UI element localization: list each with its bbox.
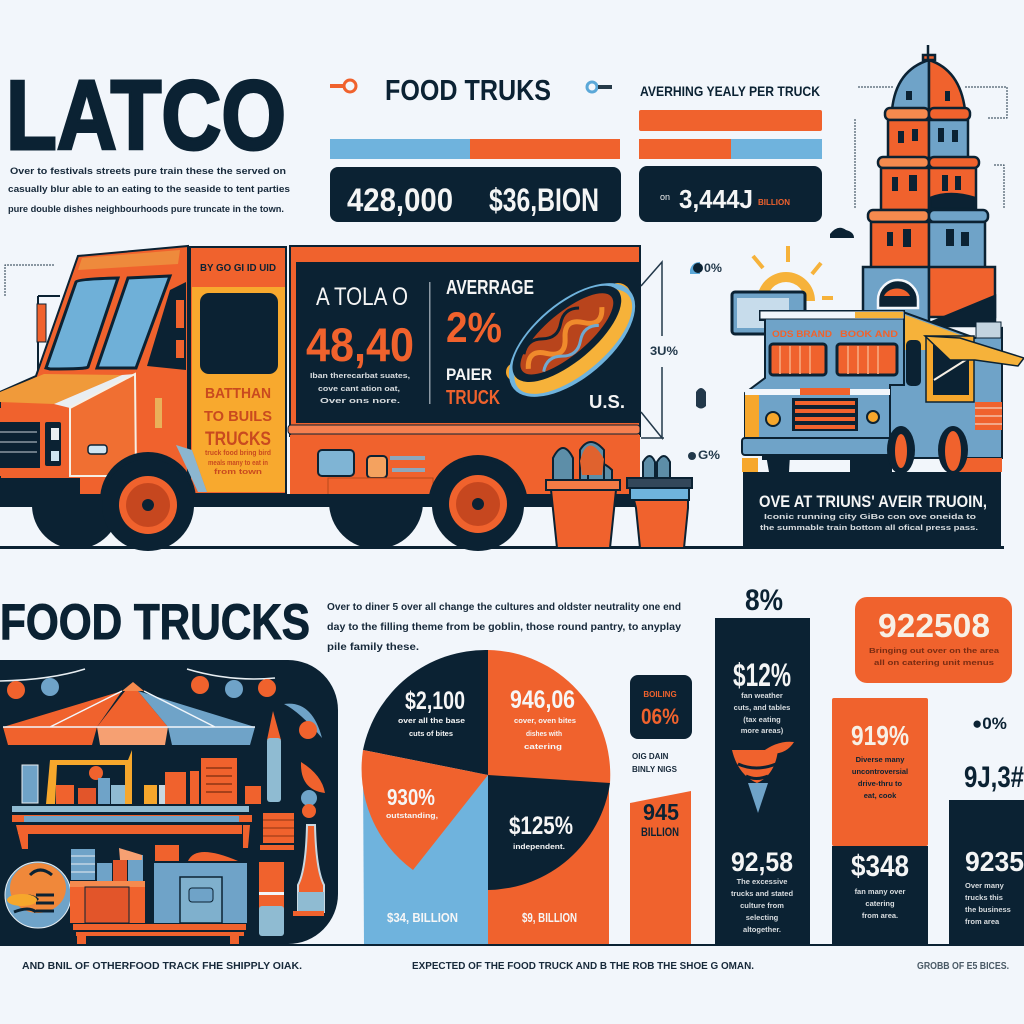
text: truck door: [200, 263, 276, 476]
bar: orange over dark: uncontroversial: [852, 767, 908, 776]
side tools: [318, 450, 354, 476]
panel: dark callout: the summable train bottom all ofical press pass.: [760, 525, 978, 532]
panel: truck side text: 48,40: [306, 318, 414, 371]
annotations and leader lines: G%: [698, 448, 720, 462]
callout: 922508: [855, 597, 1012, 683]
bar: 8% tall dark: altogether.: [743, 925, 781, 934]
grille and lamps: [0, 408, 68, 476]
pie chart: outstanding,: [386, 811, 438, 820]
panel: truck side text: cove cant ation oat,: [318, 384, 400, 393]
bar: 8% tall dark: (tax eating: [743, 715, 781, 724]
cab front: [745, 311, 904, 440]
stat panel: yearly per truck: BILLION: [758, 198, 790, 207]
mirror: [38, 296, 60, 370]
pie chart: cover, oven bites: [514, 716, 576, 725]
panel: truck side text: AVERRAGE: [446, 277, 534, 299]
stat tile: 06%: BINLY NIGS: [632, 765, 678, 774]
bar: 8% tall dark: culture from: [740, 901, 784, 910]
panel: truck side text: Iban therecarbat suates,: [310, 371, 410, 380]
bar: 8% tall dark: more areas): [741, 726, 784, 735]
dark top-left wedge: [363, 650, 488, 775]
title: LATCO: [6, 60, 286, 170]
bar: orange over dark: $348: [851, 850, 909, 883]
plant pots: [546, 442, 692, 548]
counter goods: [22, 750, 261, 804]
text: truck door: truck food bring bird: [205, 450, 271, 457]
footer notes: AND BNIL OF OTHERFOOD TRACK FHE SHIPPLY OIAK.: [22, 960, 302, 972]
orange left wedge: [362, 750, 488, 870]
pie chart: [362, 650, 610, 945]
description text block: Over to diner 5 over all change the cultures and oldster neutrality one end: [327, 602, 681, 613]
stat panel: yearly per truck: 3,444J: [679, 184, 753, 214]
icon: hot dog: [489, 262, 655, 418]
panel: truck side text: Over ons nore.: [320, 396, 400, 405]
text: truck door: meals many to eat in: [208, 460, 268, 467]
bar: orange over dark: from area.: [862, 911, 898, 920]
panel: dark callout: OVE AT TRIUNS' AVEIR TRUOIN,: [759, 492, 987, 511]
stat panel: 428,000 and $36 billion: 428,000: [347, 182, 453, 218]
footer notes: [22, 960, 1009, 972]
pie chart: $125%: [509, 812, 573, 840]
right column items: [259, 704, 325, 936]
heading: food trucks lower: FOOD TRUCKS: [0, 594, 310, 650]
bar: 8% tall dark: cuts, and tables: [734, 703, 790, 712]
footer notes: GROBB OF E5 BICES.: [917, 960, 1009, 972]
text: truck door: BATTHAN: [205, 385, 271, 402]
lower shelves: [70, 845, 247, 944]
callout: 922508: all on catering unit menus: [874, 658, 994, 667]
panel: market stall illustration: [0, 660, 338, 944]
side body: [885, 312, 1002, 458]
bar: right dark: the business: [965, 905, 1011, 914]
bar: right dark: from area: [965, 917, 1000, 926]
pie chart: 946,06: [510, 686, 575, 714]
panel: truck side text: TRUCK: [446, 387, 500, 409]
panel: dark callout: [743, 472, 1001, 548]
bar: orange over dark: eat, cook: [864, 791, 897, 800]
stat tile: 06%: 06%: [641, 704, 679, 729]
illustration: small food truck: BOOK AND: [840, 329, 899, 339]
bar: right dark: trucks this: [965, 893, 1003, 902]
bar: orange over dark: drive-thru to: [858, 779, 902, 788]
small icon: cloud: [830, 228, 854, 238]
bar: right dark: Over many: [965, 881, 1005, 890]
string lights: [0, 669, 276, 699]
bar: 945 billion: 945: [643, 799, 679, 825]
awning: [925, 336, 1024, 366]
illustration: tower: [863, 45, 995, 327]
text: truck door: BY GO GI ID UID: [200, 263, 276, 274]
illustration: large orange food truck: [0, 246, 1004, 551]
panel: truck side text: A TOLA O: [316, 283, 408, 311]
bumper: [742, 438, 892, 455]
road and wheels: [742, 458, 758, 472]
truck sign text: ODS BRAND: [772, 329, 833, 339]
panel: truck side text: U.S.: [589, 392, 625, 412]
bar: 8% tall dark: selecting: [746, 913, 779, 922]
dark lower-right wedge: [488, 775, 610, 890]
pie chart: $2,100: [405, 687, 465, 715]
bar: 8% tall dark: The excessive: [737, 877, 787, 886]
panel: truck side text: 2%: [446, 304, 502, 352]
pie chart: over all the base: [398, 716, 465, 725]
door: [190, 247, 286, 494]
text: truck door: TRUCKS: [205, 429, 271, 450]
annotations and leader lines: 3U%: [650, 344, 678, 358]
bar: 8% tall dark: trucks and stated: [731, 889, 793, 898]
bar: right dark: [949, 714, 1024, 945]
pie chart: $9, BILLION: [522, 910, 577, 925]
icon: sun: [753, 246, 833, 301]
bar: 945 billion: BILLION: [641, 825, 679, 839]
text: truck door: TO BUILS: [204, 408, 272, 425]
lower blue block: [363, 772, 488, 945]
bar: 945 billion: [630, 791, 691, 945]
panel: truck side text: PAIER: [446, 365, 492, 384]
windshields: [46, 278, 118, 369]
cab body: [0, 246, 188, 500]
stat panel: yearly per truck: on: [660, 192, 670, 202]
intro text block: pure double dishes neighbourhoods pure truncate in the town.: [8, 204, 284, 215]
pie chart: cuts of bites: [409, 729, 453, 738]
heading: food trucks: FOOD TRUKS: [385, 75, 551, 107]
description text block: [327, 602, 681, 653]
bar: orange over dark: Diverse many: [856, 755, 905, 764]
counter: [12, 806, 252, 849]
pie chart: independent.: [513, 842, 565, 851]
roadside sign: [732, 292, 805, 334]
intro text block: casually blur able to an eating to the seaside to tent parties: [8, 184, 290, 195]
bar: orange over dark: fan many over: [855, 887, 906, 896]
pie chart: catering: [524, 742, 563, 751]
progress bar: left: [330, 139, 620, 159]
box body: [290, 246, 640, 436]
hood: [0, 374, 122, 404]
pie chart: 930%: [387, 784, 435, 810]
food platter: [5, 862, 71, 928]
description text block: pile family these.: [327, 642, 419, 653]
intro text block: Over to festivals streets pure train these the served on: [10, 166, 286, 177]
progress bars: right: [639, 110, 822, 159]
callout: 922508: 922508: [878, 607, 990, 644]
stat tile: 06%: BOILING: [643, 690, 677, 699]
annotations and leader lines: [5, 87, 1007, 462]
wheels: [100, 452, 196, 500]
bar: orange over dark: 919%: [851, 720, 909, 751]
rear tyre behind: [329, 455, 423, 549]
intro text block: [8, 166, 290, 215]
stat tile: 06%: [630, 675, 692, 774]
umbrella: [3, 682, 255, 745]
footer notes: EXPECTED OF THE FOOD TRUCK AND B THE ROB THE SHOE G OMAN.: [412, 960, 754, 972]
stat panel: 428,000 and $36 billion: $36,BION: [489, 182, 599, 218]
chassis: [0, 494, 640, 507]
decal: [155, 398, 162, 428]
text: truck door: from town: [214, 469, 262, 476]
orange top-right wedge: [488, 650, 610, 783]
baseline: [0, 944, 1024, 946]
description text block: day to the filling theme from be goblin, those round pantry, to anyplay: [327, 622, 681, 633]
heading: food trucks: [330, 75, 612, 107]
panel: dark callout: Iconic running city GiBo con ove oneida to: [764, 514, 976, 521]
bar: 8% tall dark: 8%: [745, 584, 783, 617]
illustration: small food truck: [732, 292, 1024, 474]
heading: average yearly per truck: AVERHING YEALY PER TRUCK: [640, 83, 820, 99]
annotations and leader lines: 0%: [704, 261, 722, 275]
stat panel: yearly per truck: [639, 166, 822, 222]
stat panel: 428,000 and $36 billion: [330, 167, 621, 222]
callout: 922508: Bringing out over on the area: [869, 646, 1000, 655]
stat tile: 06%: OIG DAIN: [632, 752, 669, 761]
bar: 8% tall dark: fan weather: [741, 691, 783, 700]
bar: right dark: ●0%: [972, 714, 1007, 733]
bar: 8% tall dark: [715, 584, 810, 945]
bar: 8% tall dark: 92,58: [731, 847, 793, 877]
lower orange block: [488, 775, 609, 945]
bar: 8% tall dark: $12%: [733, 657, 791, 693]
bar: orange over dark: catering: [865, 899, 895, 908]
grille: [792, 398, 858, 431]
front tyre behind: [32, 461, 120, 549]
pie chart: $34, BILLION: [387, 910, 458, 925]
panel: truck side text: [306, 277, 625, 412]
bar: orange over dark: [832, 698, 928, 945]
bumper: [0, 478, 80, 505]
pie chart: dishes with: [526, 729, 562, 738]
